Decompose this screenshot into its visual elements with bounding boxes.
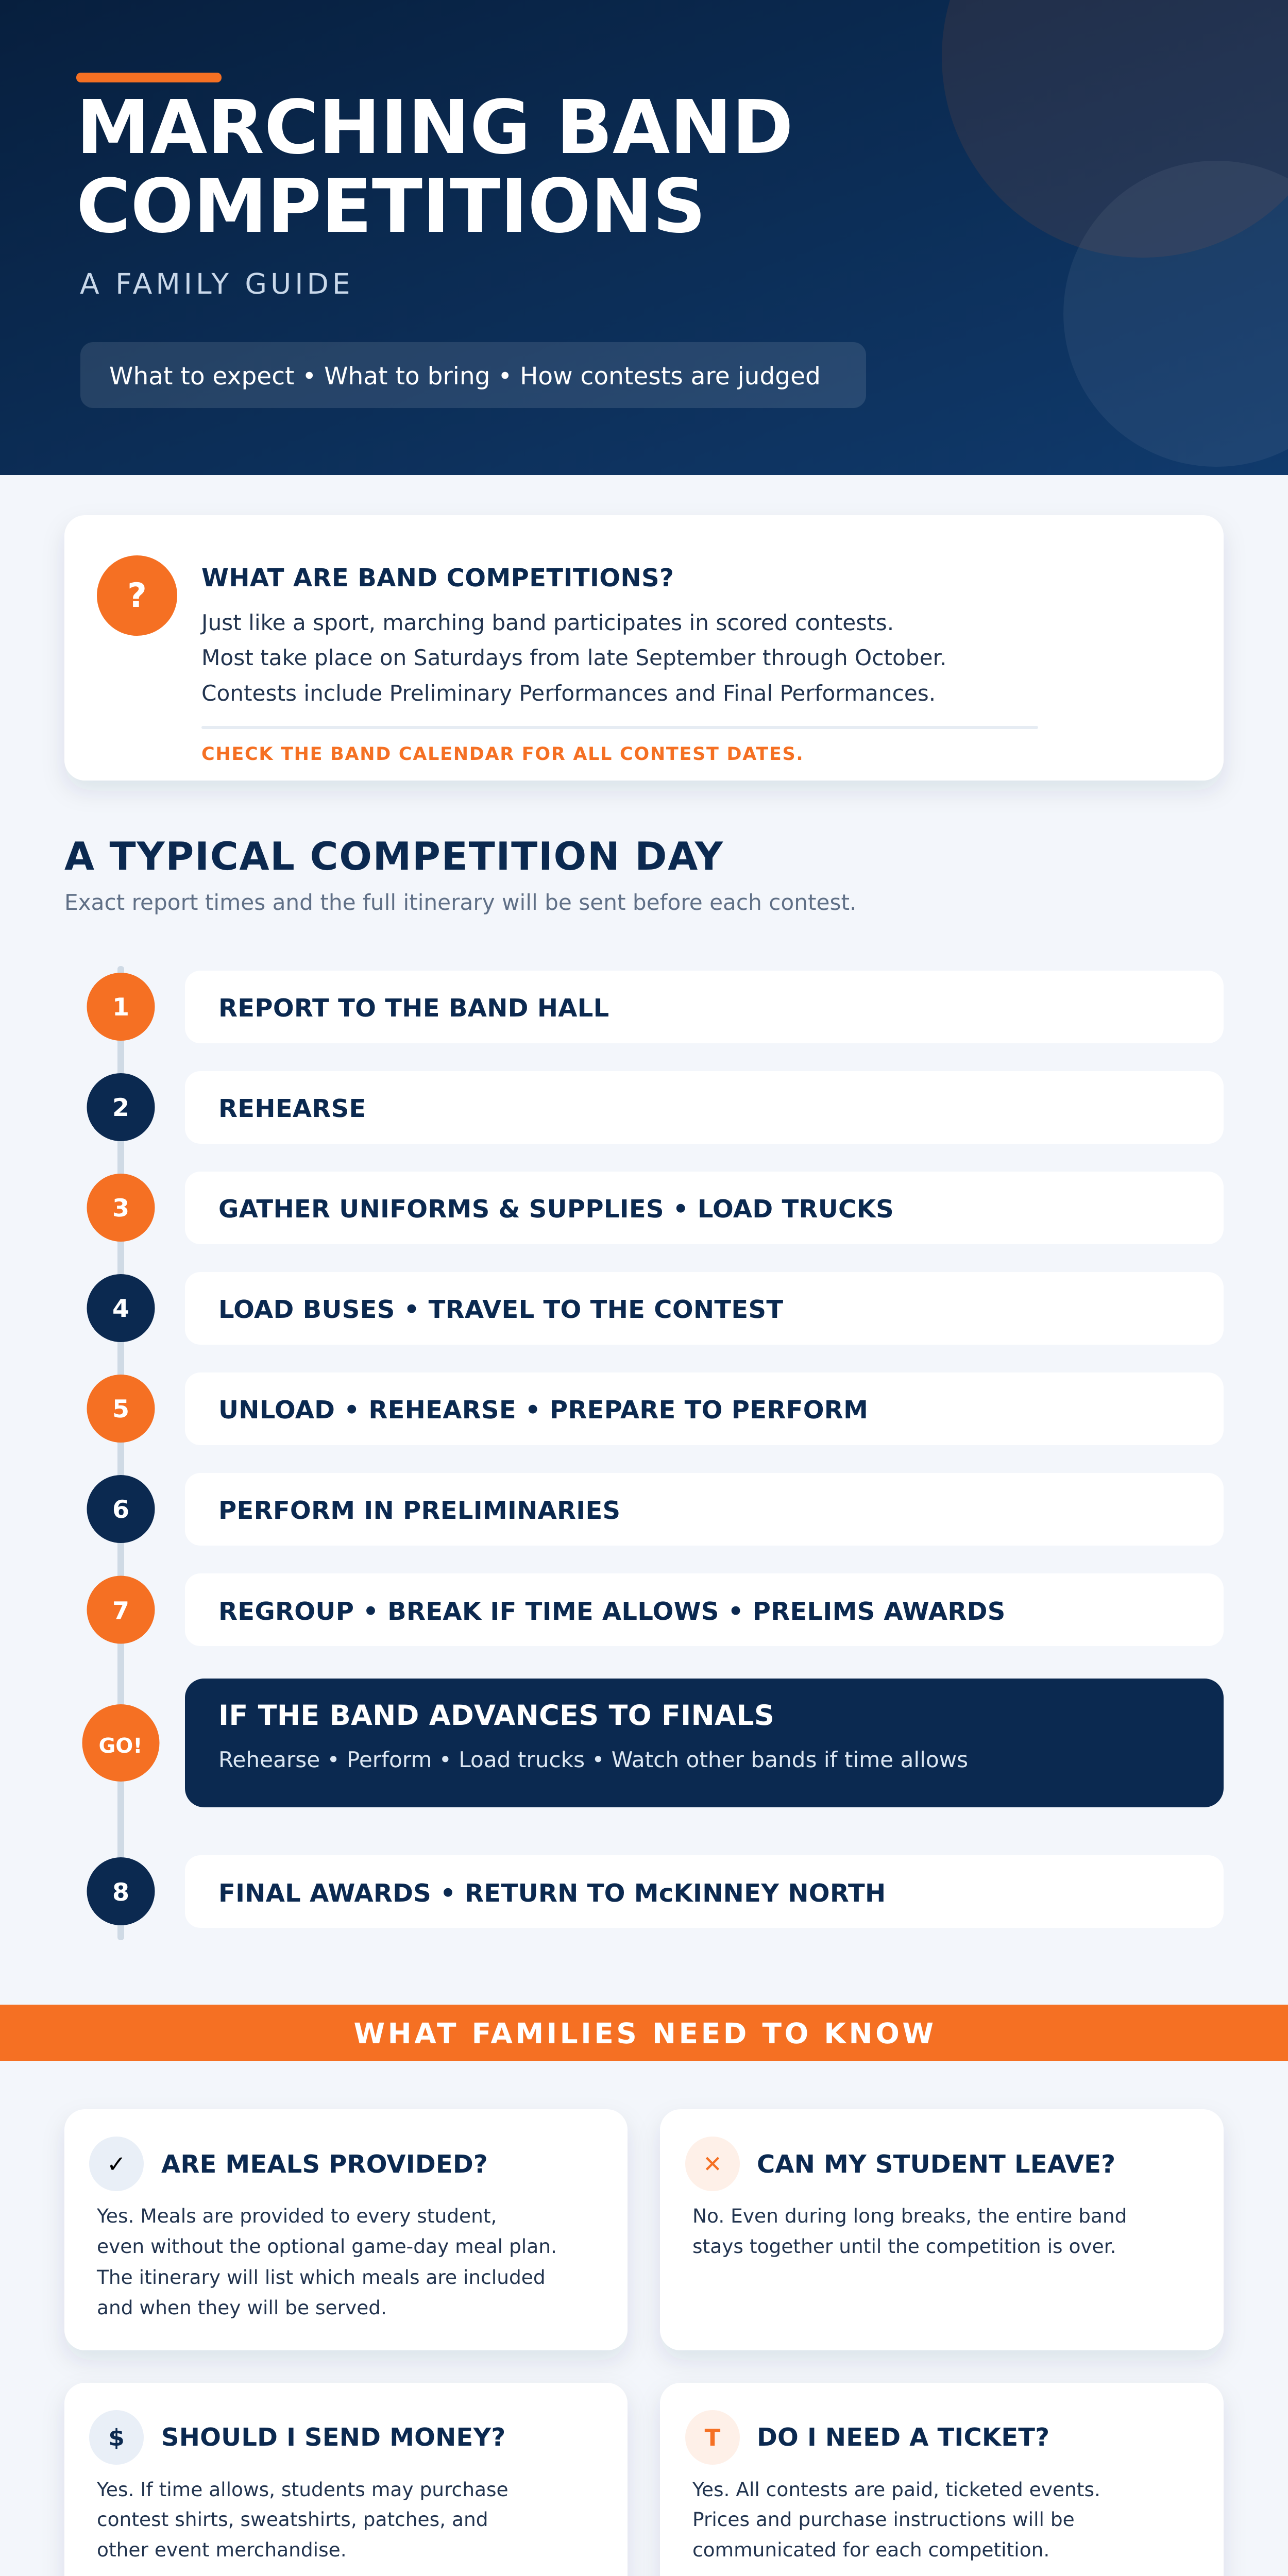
section heading: typical day: A TYPICAL COMPETITION DAY <box>64 834 724 879</box>
section heading: typical day: Exact report times and the full itinerary will be sent before each contest. <box>64 890 856 915</box>
tagline pill: What to expect • What to bring • How contests are judged <box>109 362 821 391</box>
icon: dollar <box>89 2410 144 2465</box>
calendar callout: CHECK THE BAND CALENDAR FOR ALL CONTEST DATES. <box>201 744 804 765</box>
step 8 <box>87 1855 1224 1928</box>
step 7: 7 <box>112 1597 129 1625</box>
header banner <box>0 0 1288 475</box>
card: money: other event merchandise. <box>97 2538 347 2561</box>
card: meals: even without the optional game-day meal plan. <box>97 2235 557 2258</box>
finals step: GO! <box>98 1734 143 1758</box>
step 4 <box>87 1272 1224 1345</box>
icon: ticket <box>685 2410 740 2465</box>
title: COMPETITIONS <box>76 163 706 249</box>
card: tickets: Prices and purchase instructions will be <box>692 2508 1075 2531</box>
card: meals: ARE MEALS PROVIDED? <box>161 2150 488 2179</box>
icon: dollar: $ <box>108 2424 125 2451</box>
card: money: SHOULD I SEND MONEY? <box>161 2423 505 2452</box>
description: Contests include Preliminary Performances and Final Performances. <box>201 681 936 706</box>
card: meals: Yes. Meals are provided to every student, <box>96 2205 497 2227</box>
step 7 <box>87 1573 1224 1646</box>
card: meals: and when they will be served. <box>97 2296 387 2319</box>
step 3: 3 <box>112 1194 129 1223</box>
icon: question mark <box>97 555 177 636</box>
step 7: REGROUP • BREAK IF TIME ALLOWS • PRELIMS AWARDS <box>218 1597 1006 1626</box>
icon: ticket: T <box>705 2424 721 2451</box>
heading: WHAT ARE BAND COMPETITIONS? <box>201 564 674 592</box>
step 6 <box>87 1473 1224 1546</box>
card: meals <box>64 2109 628 2350</box>
card: money <box>64 2383 628 2576</box>
step 2: REHEARSE <box>218 1094 366 1123</box>
card: meals: The itinerary will list which meals are included <box>96 2266 546 2289</box>
finals step: IF THE BAND ADVANCES TO FINALS <box>218 1699 774 1732</box>
description: Just like a sport, marching band participates in scored contests. <box>200 610 894 635</box>
card: money: Yes. If time allows, students may purchase <box>96 2478 509 2501</box>
step 5: 5 <box>112 1395 129 1423</box>
step 6: 6 <box>112 1496 129 1524</box>
step 4: LOAD BUSES • TRAVEL TO THE CONTEST <box>218 1295 783 1324</box>
card: tickets: Yes. All contests are paid, ticketed events. <box>692 2478 1100 2501</box>
step 3: GATHER UNIFORMS & SUPPLIES • LOAD TRUCKS <box>218 1195 894 1224</box>
card: leaving <box>660 2109 1224 2350</box>
finals step <box>82 1679 1224 1807</box>
card: tickets: DO I NEED A TICKET? <box>757 2423 1049 2452</box>
panel: what are band competitions <box>64 515 1224 781</box>
step 5: UNLOAD • REHEARSE • PREPARE TO PERFORM <box>218 1396 868 1425</box>
step 4: 4 <box>112 1295 129 1323</box>
step 1 <box>87 971 1224 1043</box>
icon: check <box>89 2137 144 2191</box>
card: leaving: stays together until the competition is over. <box>692 2235 1116 2258</box>
step 2: 2 <box>112 1094 129 1122</box>
title: MARCHING BAND <box>76 84 793 171</box>
card: money: contest shirts, sweatshirts, patches, and <box>97 2508 488 2531</box>
step 8: FINAL AWARDS • RETURN TO McKINNEY NORTH <box>218 1879 886 1908</box>
timeline <box>82 966 1224 1940</box>
section banner: what families need to know: WHAT FAMILIES NEED TO KNOW <box>353 2017 937 2050</box>
section heading: typical day <box>64 834 856 915</box>
icon: x: ✕ <box>703 2150 722 2178</box>
orange accent bar <box>76 73 222 82</box>
step 1: REPORT TO THE BAND HALL <box>218 994 609 1023</box>
icon: question mark: ? <box>127 577 147 615</box>
subtitle: A FAMILY GUIDE <box>80 267 354 300</box>
tagline pill <box>80 342 866 408</box>
finals step: Rehearse • Perform • Load trucks • Watch other bands if time allows <box>218 1747 968 1772</box>
step 1: 1 <box>112 993 129 1022</box>
step 2 <box>87 1071 1224 1144</box>
description: Most take place on Saturdays from late September through October. <box>201 645 946 670</box>
step 6: PERFORM IN PRELIMINARIES <box>218 1496 620 1525</box>
card: leaving: CAN MY STUDENT LEAVE? <box>757 2150 1115 2179</box>
icon: x <box>685 2137 740 2191</box>
icon: check: ✓ <box>107 2150 126 2178</box>
card: leaving: No. Even during long breaks, the entire band <box>692 2205 1127 2227</box>
section banner: what families need to know <box>0 2005 1288 2061</box>
card: tickets: communicated for each competition. <box>692 2538 1049 2561</box>
step 3 <box>87 1172 1224 1244</box>
step 5 <box>87 1372 1224 1445</box>
card: tickets <box>660 2383 1224 2576</box>
step 8: 8 <box>112 1878 129 1907</box>
